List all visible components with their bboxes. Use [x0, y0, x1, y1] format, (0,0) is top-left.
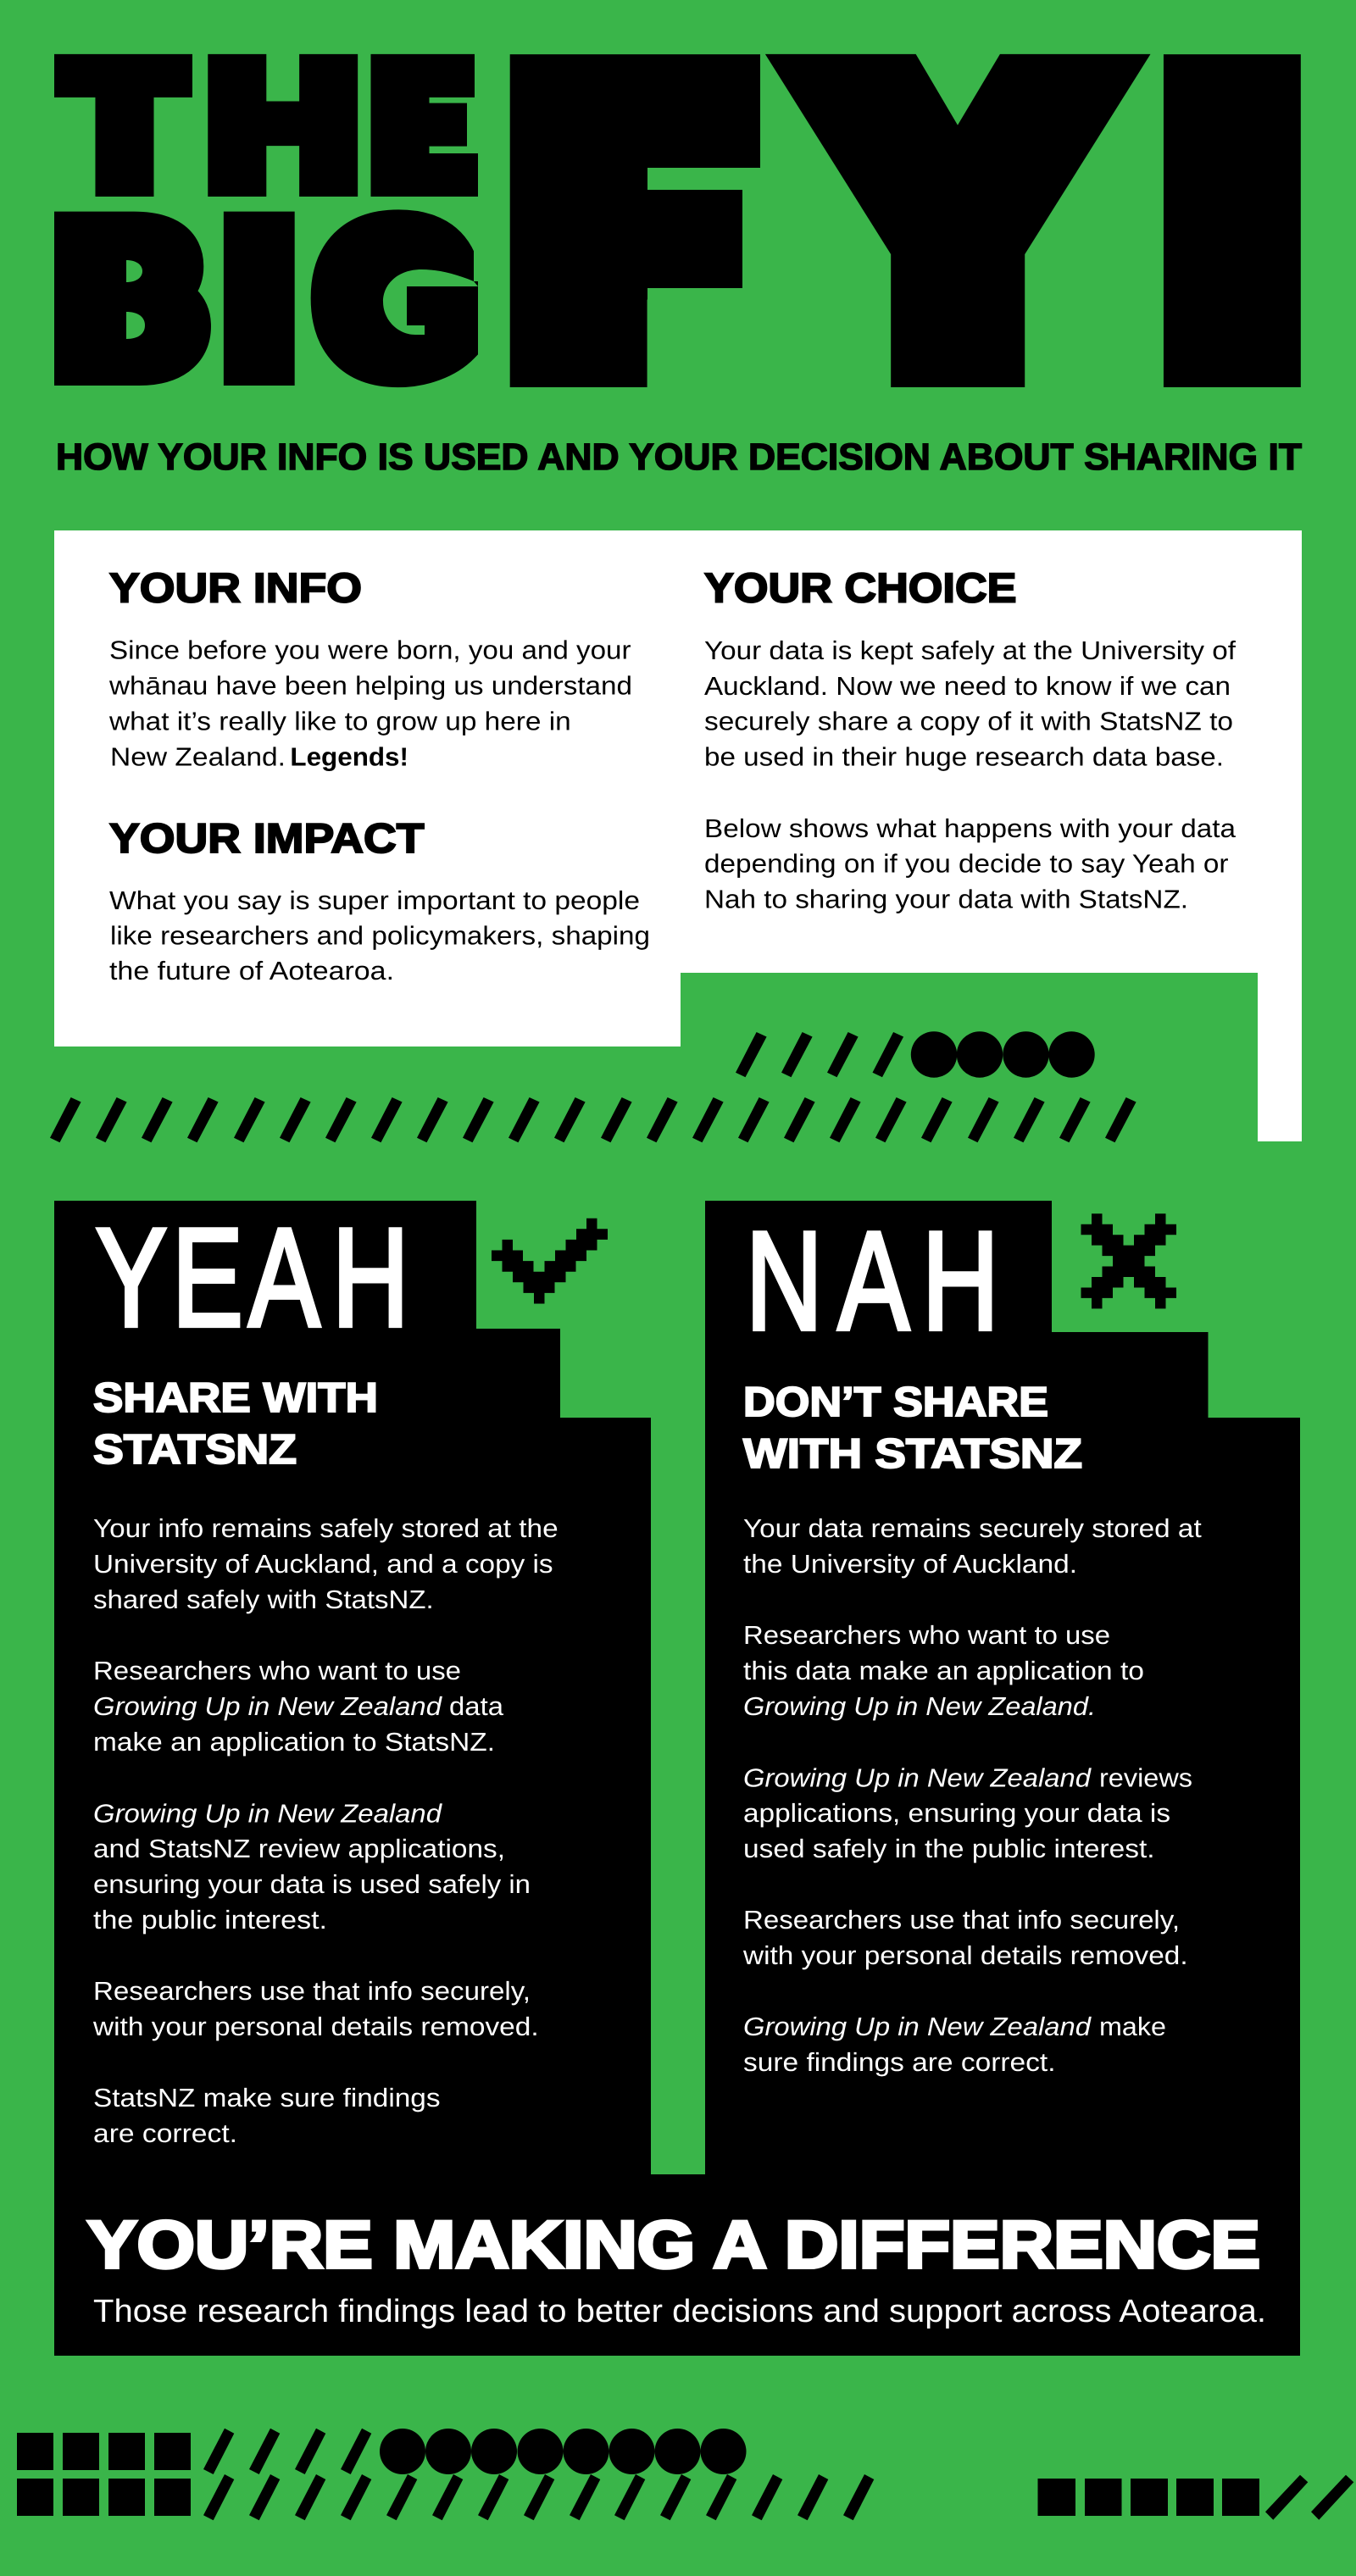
- heading: share with statsnz: STATSNZ: [93, 1427, 297, 1473]
- text: yeah steps: the public interest.: [93, 1906, 327, 1935]
- label: YEAH: YEAH: [96, 1200, 409, 1357]
- text: yeah steps: Growing Up in New Zealand: [93, 1799, 442, 1828]
- decoration: bottom right pattern: [1037, 2475, 1353, 2520]
- text: closing line: Those research findings lead to better decisions and support across Aotearoa.: [93, 2294, 1266, 2329]
- heading: share with statsnz: [93, 1375, 378, 1473]
- panel: white intro: [54, 530, 1302, 1141]
- text: nah steps: Growing Up in New Zealand: [743, 1763, 1092, 1792]
- heading: don't share with statsnz: DON’T SHARE: [743, 1380, 1048, 1425]
- text: yeah steps: Your info remains safely stored at the: [93, 1514, 559, 1543]
- text: your impact body: like researchers and policymakers, shaping: [110, 921, 650, 950]
- text: your impact body: What you say is super important to people: [109, 886, 640, 915]
- text: your choice body: [704, 636, 1237, 914]
- title letter: F: F: [532, 28, 735, 415]
- text: yeah steps: StatsNZ make sure findings: [93, 2084, 441, 2112]
- heading: don't share with statsnz: WITH STATSNZ: [743, 1431, 1082, 1477]
- text: nah steps: applications, ensuring your data is: [743, 1799, 1170, 1828]
- text: your choice body: be used in their huge research data base.: [704, 742, 1224, 771]
- heading: your impact: YOUR IMPACT: [109, 816, 425, 862]
- text: nah steps: reviews: [1099, 1763, 1192, 1792]
- text: nah steps: [742, 1514, 1202, 2077]
- text: nah steps: Growing Up in New Zealand.: [743, 1692, 1096, 1721]
- heading: your info: YOUR INFO: [109, 566, 362, 612]
- text: your choice body: securely share a copy of it with StatsNZ to: [704, 708, 1233, 736]
- text: nah steps: the University of Auckland.: [743, 1550, 1077, 1579]
- text: your info body: Since before you were born, you and your: [109, 636, 631, 664]
- text: yeah steps: with your personal details removed.: [92, 2012, 539, 2041]
- decoration: long slash row: [50, 1097, 1136, 1142]
- text: your choice body: Nah to sharing your data with StatsNZ.: [704, 886, 1188, 914]
- text: nah steps: used safely in the public interest.: [743, 1835, 1155, 1863]
- text: yeah steps: ensuring your data is used safely in: [93, 1870, 531, 1899]
- decoration: slashes and dots row: [736, 1031, 1095, 1078]
- text: nah steps: Your data remains securely stored at: [743, 1514, 1202, 1543]
- icon: pixel check mark: [492, 1219, 608, 1303]
- panel: nah: [705, 1201, 1300, 2178]
- text: your info body: [108, 636, 632, 772]
- text: yeah steps: make an application to StatsNZ.: [93, 1728, 495, 1757]
- text: nah steps: this data make an application to: [743, 1657, 1144, 1685]
- subtitle: HOW YOUR INFO IS USED AND YOUR DECISION ABOUT SHARING IT: [56, 436, 1302, 478]
- text: yeah steps: data: [449, 1692, 503, 1721]
- text: yeah steps: Growing Up in New Zealand: [93, 1692, 442, 1721]
- text: your choice body: Auckland. Now we need to know if we can: [704, 672, 1231, 701]
- text: your info body: whānau have been helping us understand: [108, 672, 632, 701]
- text: yeah steps: are correct.: [93, 2119, 237, 2148]
- text: your info body: Legends!: [290, 743, 408, 772]
- text: yeah steps: Researchers who want to use: [93, 1657, 461, 1685]
- text: your impact body: [109, 886, 650, 985]
- text: nah steps: make: [1099, 2012, 1166, 2041]
- heading: share with statsnz: SHARE WITH: [93, 1375, 378, 1421]
- heading: you're making a difference: YOU’RE MAKING A DIFFERENCE: [87, 2207, 1260, 2282]
- title letter: I: I: [1186, 28, 1278, 415]
- title word: THE: THE: [62, 30, 508, 221]
- panel: yeah: [54, 1200, 651, 2178]
- text: your info body: New Zealand.: [110, 743, 286, 772]
- label: NAH: NAH: [746, 1203, 999, 1360]
- text: nah steps: Researchers use that info securely,: [743, 1906, 1180, 1935]
- decoration: bottom left pattern: [17, 2429, 874, 2520]
- text: nah steps: Researchers who want to use: [743, 1621, 1110, 1650]
- text: yeah steps: shared safely with StatsNZ.: [93, 1585, 434, 1614]
- heading: your choice: YOUR CHOICE: [704, 566, 1017, 612]
- text: yeah steps: and StatsNZ review applications,: [93, 1835, 505, 1863]
- text: nah steps: with your personal details removed.: [742, 1941, 1188, 1970]
- text: your choice body: Below shows what happens with your data: [704, 814, 1236, 843]
- text: nah steps: sure findings are correct.: [743, 2048, 1056, 2077]
- title word: BIG: BIG: [63, 194, 470, 403]
- text: nah steps: Growing Up in New Zealand: [743, 2012, 1092, 2041]
- text: yeah steps: [92, 1514, 559, 2148]
- text: your choice body: depending on if you decide to say Yeah or: [704, 849, 1229, 878]
- text: your info body: what it’s really like to grow up here in: [108, 707, 571, 736]
- title letter: Y: Y: [828, 12, 1087, 430]
- text: yeah steps: Researchers use that info securely,: [93, 1977, 531, 2006]
- title: THE BIG FYI: [0, 12, 1278, 430]
- heading: don't share with statsnz: [743, 1380, 1082, 1477]
- text: your choice body: Your data is kept safely at the University of: [704, 636, 1237, 665]
- text: your impact body: the future of Aotearoa.: [109, 957, 394, 985]
- text: yeah steps: University of Auckland, and a copy is: [93, 1550, 553, 1579]
- panel: making a difference: [54, 2174, 1300, 2356]
- icon: pixel cross: [1081, 1213, 1176, 1308]
